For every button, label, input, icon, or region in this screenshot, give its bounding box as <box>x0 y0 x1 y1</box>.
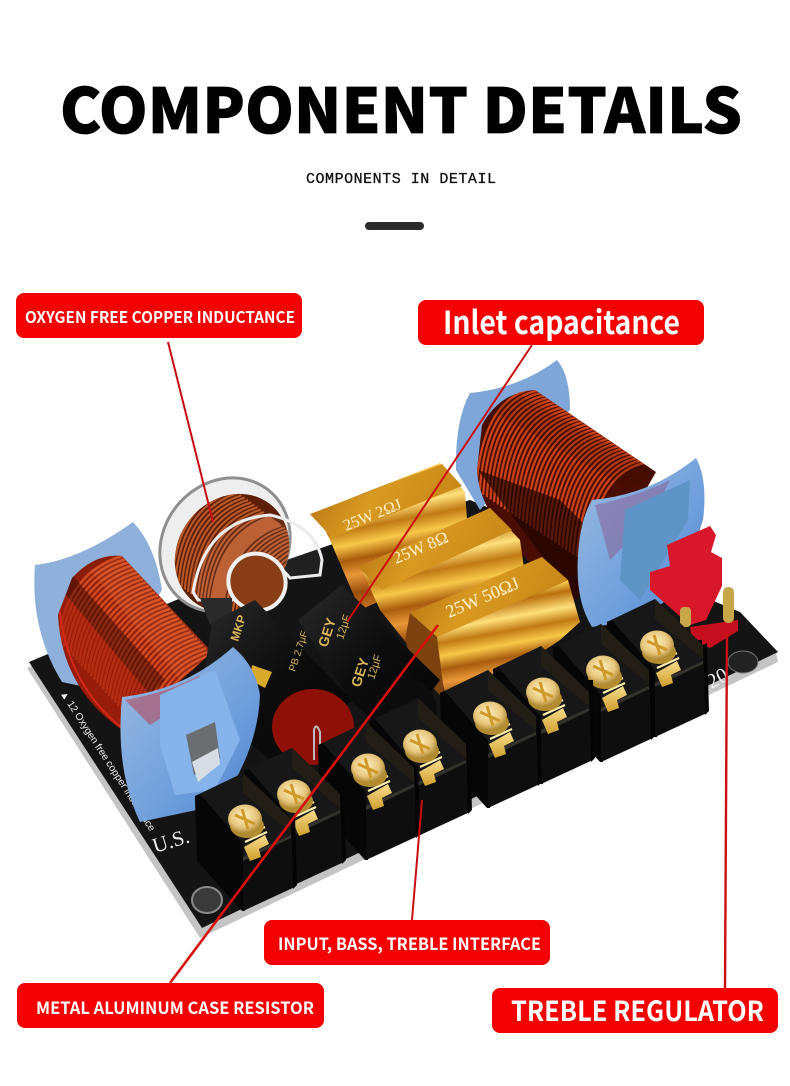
left copper coil <box>58 556 208 729</box>
capacitor 12uF: GEY <box>348 655 372 689</box>
capacitor 2.7uF with red end: PB 2.7μF <box>287 630 311 673</box>
capacitor 12uF: 12μF <box>334 613 354 641</box>
title: COMPONENT DETAILS <box>60 61 742 151</box>
label: input bass treble interface: INPUT, BASS, TREBLE INTERFACE <box>278 930 541 955</box>
board markings: 120 <box>693 662 732 698</box>
resistor 25W 8 ohm: 25W 8Ω <box>390 527 451 568</box>
label: inlet capacitance: Inlet capacitance <box>443 298 680 344</box>
left front blue flange <box>120 647 260 822</box>
title divider bar <box>365 222 424 230</box>
capacitor 12uF <box>298 585 440 746</box>
left back blue flange <box>34 522 162 690</box>
board markings <box>57 662 732 858</box>
right back blue flange <box>456 360 570 510</box>
label: metal aluminum case resistor: METAL ALUMINUM CASE RESISTOR <box>36 994 314 1019</box>
board markings: U.S. <box>149 824 192 858</box>
subtitle: COMPONENTS IN DETAIL <box>306 171 496 188</box>
capacitor 2.7uF with red end: MKP <box>228 613 249 643</box>
red treble jumper <box>650 526 738 648</box>
label: metal aluminum case resistor <box>17 983 324 1028</box>
capacitor 12uF: 12μF <box>365 653 385 681</box>
resistor 25W 50 ohm: 25W 50ΩJ <box>443 573 522 622</box>
screw terminal blocks <box>195 599 709 911</box>
resistor 25W 50 ohm <box>405 557 580 708</box>
capacitor 2.7uF with red end <box>200 600 354 770</box>
mounting hole left <box>192 887 222 913</box>
label: input bass treble interface <box>264 920 550 965</box>
board markings: ▲ 12 Oxygen free copper inductance <box>57 689 157 834</box>
label: oxygen free copper inductance: OXYGEN FREE COPPER INDUCTANCE <box>25 304 295 328</box>
resistor 25W 2 ohm <box>310 463 470 610</box>
small air-core inductor <box>158 476 324 625</box>
leader line: regulator <box>725 633 727 988</box>
product photo: crossover board <box>27 360 778 938</box>
resistor 25W 8 ohm <box>358 508 530 660</box>
right front blue flange <box>578 458 704 627</box>
mounting hole right <box>728 651 758 673</box>
circuit board <box>27 500 778 938</box>
resistor 25W 2 ohm: 25W 2ΩJ <box>341 496 404 535</box>
leader line: interface <box>412 800 422 920</box>
label: oxygen free copper inductance <box>16 293 302 338</box>
leader line: capacitance <box>347 345 532 622</box>
leader line: inductance <box>168 342 213 522</box>
label: treble regulator: TREBLE REGULATOR <box>511 990 764 1030</box>
leader line: resistor <box>170 625 438 983</box>
capacitor 12uF: GEY <box>315 615 339 649</box>
right copper coil <box>476 388 656 600</box>
